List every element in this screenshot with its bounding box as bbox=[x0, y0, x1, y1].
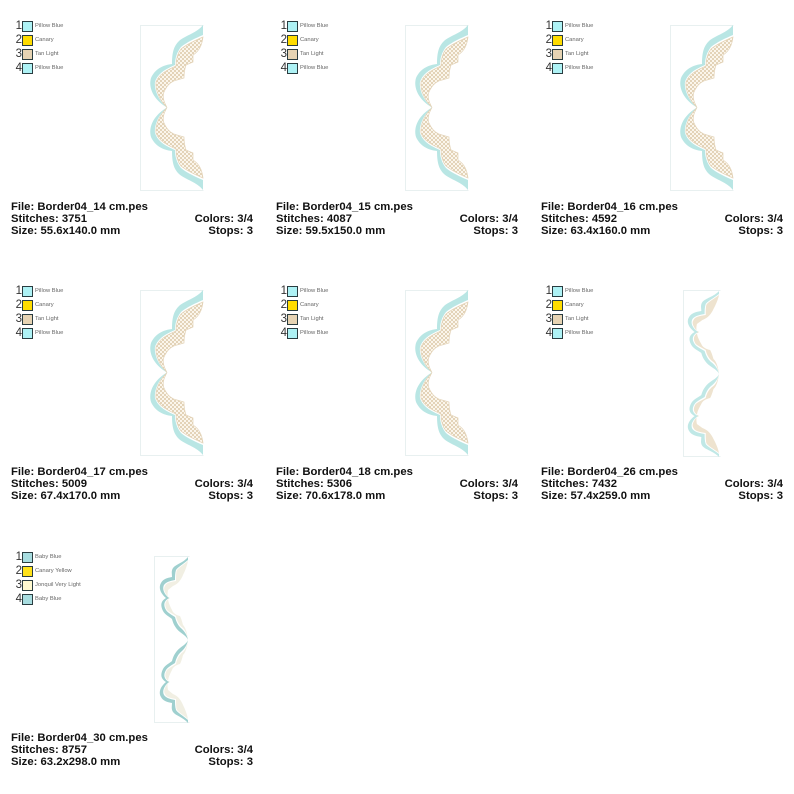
file details: File: Border04_26 cm.pes bbox=[541, 466, 678, 478]
color legend bbox=[16, 551, 81, 605]
color legend: Pillow Blue bbox=[35, 330, 63, 336]
embroidery design: scalloped border bbox=[405, 25, 468, 191]
file details: Stops: 3 bbox=[473, 490, 518, 502]
file details: Stops: 3 bbox=[473, 225, 518, 237]
file details: Stops: 3 bbox=[738, 225, 783, 237]
panel: Border04_17 cm bbox=[11, 285, 253, 502]
file details: Stops: 3 bbox=[208, 756, 253, 768]
file details bbox=[11, 201, 253, 237]
color legend: 3 bbox=[546, 313, 552, 325]
panel: Border04_15 cm bbox=[276, 20, 518, 237]
embroidery design: scalloped border bbox=[670, 25, 734, 191]
file details: Stitches: 8757 bbox=[11, 744, 87, 756]
color legend: 3 bbox=[546, 48, 552, 60]
color legend: Pillow Blue bbox=[565, 330, 593, 336]
file details: Size: 70.6x178.0 mm bbox=[276, 490, 385, 502]
file details: Size: 55.6x140.0 mm bbox=[11, 225, 120, 237]
file details: Stitches: 5306 bbox=[276, 478, 352, 490]
file details: File: Border04_17 cm.pes bbox=[11, 466, 148, 478]
color legend: 1 bbox=[281, 20, 287, 32]
file details bbox=[11, 732, 253, 768]
color legend: 3 bbox=[281, 48, 287, 60]
panel: Border04_18 cm bbox=[276, 285, 518, 502]
file details: Colors: 3/4 bbox=[195, 744, 253, 756]
color legend: Pillow Blue bbox=[35, 23, 63, 29]
color legend: 1 bbox=[16, 285, 22, 297]
color legend bbox=[16, 20, 64, 74]
color legend: Canary Yellow bbox=[35, 568, 72, 574]
color legend: 4 bbox=[546, 62, 552, 74]
color legend: Tan Light bbox=[300, 316, 324, 322]
color legend: 4 bbox=[281, 327, 287, 339]
file details: Stops: 3 bbox=[208, 490, 253, 502]
file details: File: Border04_30 cm.pes bbox=[11, 732, 148, 744]
color legend: Pillow Blue bbox=[35, 288, 63, 294]
color legend bbox=[16, 285, 64, 339]
color legend: Canary bbox=[35, 302, 54, 308]
file details: Colors: 3/4 bbox=[725, 478, 783, 490]
panel: Border04_16 cm bbox=[541, 20, 783, 237]
color legend: Pillow Blue bbox=[565, 23, 593, 29]
color legend: Canary bbox=[300, 37, 319, 43]
color legend: Tan Light bbox=[300, 51, 324, 57]
color legend: 2 bbox=[546, 34, 552, 46]
file details: Stops: 3 bbox=[738, 490, 783, 502]
color legend: 4 bbox=[16, 327, 22, 339]
color legend: Pillow Blue bbox=[565, 288, 593, 294]
file details bbox=[276, 466, 518, 502]
color legend: Tan Light bbox=[35, 51, 59, 57]
file details: Stitches: 5009 bbox=[11, 478, 87, 490]
file details: File: Border04_16 cm.pes bbox=[541, 201, 678, 213]
color legend: Pillow Blue bbox=[300, 23, 328, 29]
color legend: Canary bbox=[565, 302, 584, 308]
file details bbox=[541, 466, 783, 502]
file details: Colors: 3/4 bbox=[725, 213, 783, 225]
color legend: 1 bbox=[16, 551, 22, 563]
file details: Stops: 3 bbox=[208, 225, 253, 237]
color legend: 3 bbox=[281, 313, 287, 325]
file details bbox=[541, 201, 783, 237]
color legend: 4 bbox=[16, 62, 22, 74]
color legend: Tan Light bbox=[35, 316, 59, 322]
file details: File: Border04_14 cm.pes bbox=[11, 201, 148, 213]
file details bbox=[11, 466, 253, 502]
color legend: Tan Light bbox=[565, 316, 589, 322]
color legend: Baby Blue bbox=[35, 554, 61, 560]
file details: Colors: 3/4 bbox=[195, 213, 253, 225]
color legend: 1 bbox=[546, 20, 552, 32]
file details: Stitches: 4592 bbox=[541, 213, 617, 225]
color legend: Jonquil Very Light bbox=[35, 582, 81, 588]
color legend: Pillow Blue bbox=[35, 65, 63, 71]
color legend: Pillow Blue bbox=[300, 288, 328, 294]
color legend: 1 bbox=[16, 20, 22, 32]
panel: Border04_14 cm bbox=[11, 20, 253, 237]
color legend: Tan Light bbox=[565, 51, 589, 57]
file details: Size: 67.4x170.0 mm bbox=[11, 490, 120, 502]
color legend: 2 bbox=[16, 299, 22, 311]
color legend: 2 bbox=[16, 565, 22, 577]
color legend: 2 bbox=[16, 34, 22, 46]
color legend: Pillow Blue bbox=[300, 330, 328, 336]
panel: Border04_30 cm bbox=[11, 551, 253, 768]
color legend: 4 bbox=[16, 593, 22, 605]
color legend bbox=[280, 285, 328, 339]
color legend: Canary bbox=[565, 37, 584, 43]
color legend: Canary bbox=[300, 302, 319, 308]
file details: Stitches: 7432 bbox=[541, 478, 617, 490]
file details: Size: 57.4x259.0 mm bbox=[541, 490, 650, 502]
file details: Colors: 3/4 bbox=[195, 478, 253, 490]
color legend: 3 bbox=[16, 313, 22, 325]
color legend: Canary bbox=[35, 37, 54, 43]
file details: Size: 63.4x160.0 mm bbox=[541, 225, 650, 237]
color legend: 1 bbox=[546, 285, 552, 297]
file details: File: Border04_18 cm.pes bbox=[276, 466, 413, 478]
color legend bbox=[546, 285, 594, 339]
embroidery design: scalloped border bbox=[140, 290, 204, 456]
color legend: 4 bbox=[281, 62, 287, 74]
panel: Border04_26 cm bbox=[541, 285, 783, 502]
color legend: 2 bbox=[281, 299, 287, 311]
color legend bbox=[546, 20, 594, 74]
file details: Colors: 3/4 bbox=[460, 478, 518, 490]
file details bbox=[276, 201, 518, 237]
color legend: Baby Blue bbox=[35, 596, 61, 602]
color legend: 2 bbox=[281, 34, 287, 46]
file details: File: Border04_15 cm.pes bbox=[276, 201, 413, 213]
file details: Stitches: 4087 bbox=[276, 213, 352, 225]
color legend: 4 bbox=[546, 327, 552, 339]
file details: Stitches: 3751 bbox=[11, 213, 87, 225]
embroidery design: scalloped border bbox=[154, 556, 190, 723]
file details: Size: 59.5x150.0 mm bbox=[276, 225, 385, 237]
embroidery design: scalloped border bbox=[140, 25, 204, 191]
color legend bbox=[280, 20, 328, 74]
file details: Colors: 3/4 bbox=[460, 213, 518, 225]
file details: Size: 63.2x298.0 mm bbox=[11, 756, 120, 768]
color legend: 1 bbox=[281, 285, 287, 297]
embroidery design: scalloped border bbox=[405, 290, 468, 456]
color legend: 3 bbox=[16, 579, 22, 591]
color legend: Pillow Blue bbox=[565, 65, 593, 71]
color legend: 2 bbox=[546, 299, 552, 311]
embroidery design: scalloped border bbox=[683, 290, 720, 457]
color legend: 3 bbox=[16, 48, 22, 60]
color legend: Pillow Blue bbox=[300, 65, 328, 71]
